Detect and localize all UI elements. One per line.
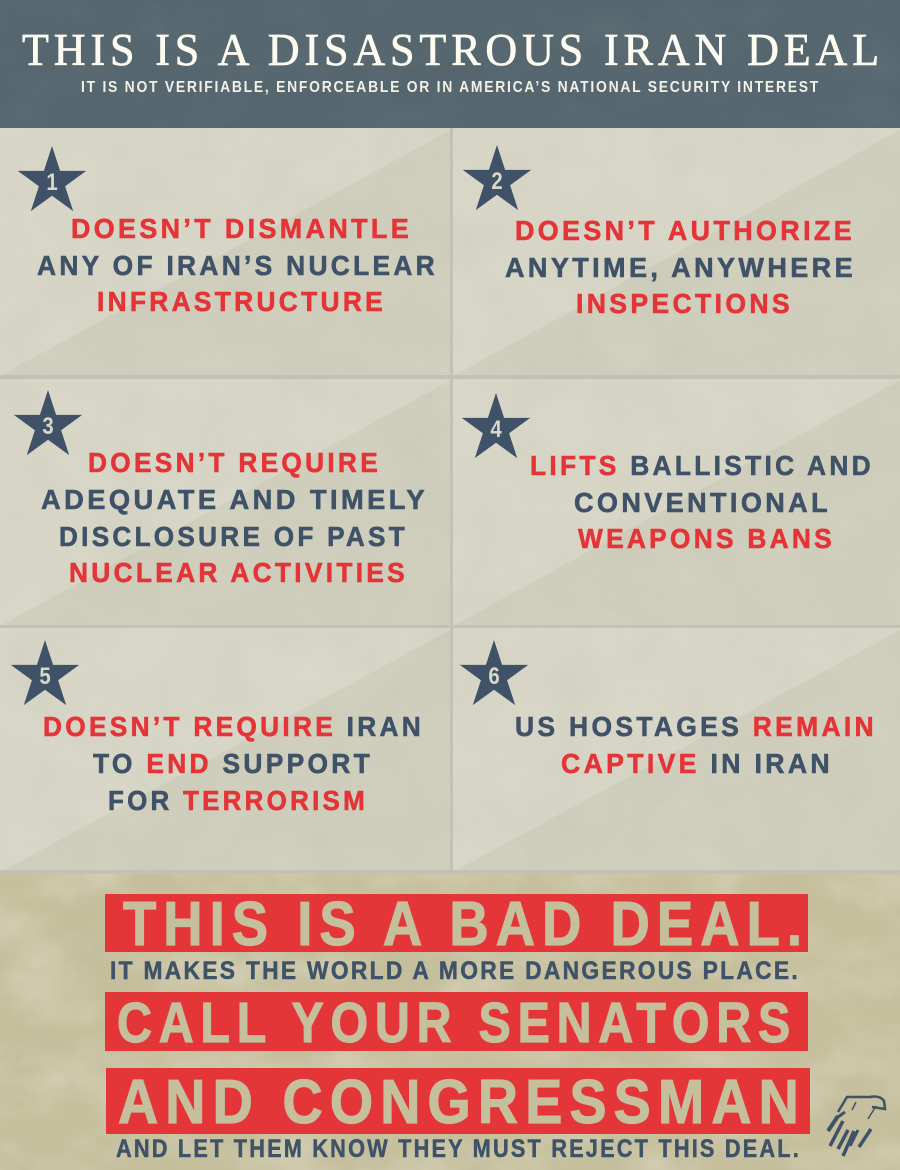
text: item 3: DOESN’T REQUIRE (88, 447, 381, 478)
panel: item 3 diagonal shade (0, 380, 451, 626)
icon: eagle logo (828, 1096, 885, 1156)
text: item 2: INSPECTIONS (576, 288, 793, 319)
icon: star 1 (18, 146, 86, 211)
icon: star 5 (11, 640, 79, 705)
banner: and congressman: AND CONGRESSMAN (118, 1068, 806, 1137)
text: item 4 (530, 450, 874, 554)
panel: header band (0, 0, 900, 128)
panel: item 4 diagonal shade (453, 380, 900, 626)
text: item 2 (505, 215, 856, 319)
icon: star 6: 6 (488, 662, 500, 689)
text: item 5: TO END SUPPORT (93, 748, 373, 779)
panel: item 2 diagonal shade (453, 130, 900, 376)
icon: star 4: 4 (490, 415, 502, 442)
text: reject this deal: AND LET THEM KNOW THEY MUST REJECT THIS DEAL. (116, 1135, 801, 1163)
panel: item 3 (14, 390, 428, 588)
text: item 5: DOESN’T REQUIRE IRAN (43, 711, 424, 742)
text: item 6: US HOSTAGES REMAIN (515, 711, 877, 742)
title: THIS IS A DISASTROUS IRAN DEAL (22, 25, 884, 75)
panel: item 4 (462, 393, 874, 554)
panel: call to action background (0, 874, 900, 1170)
banner: this is a bad deal: THIS IS A BAD DEAL. (123, 890, 809, 959)
panel: item 5 diagonal shade (0, 630, 451, 872)
text: item 5: FOR TERRORISM (108, 785, 368, 816)
text: item 1: DOESN’T DISMANTLE (71, 213, 412, 244)
text: item 2: DOESN’T AUTHORIZE (515, 215, 855, 246)
text: item 5 (43, 711, 424, 816)
text: item 1: ANY OF IRAN’S NUCLEAR (37, 250, 438, 281)
panel: item 1 (18, 146, 438, 317)
text: item 4: CONVENTIONAL (574, 487, 831, 518)
panel: item 6 diagonal shade (453, 630, 900, 872)
panel: item 2 (463, 145, 856, 319)
icon: star 6 (460, 640, 528, 705)
text: item 1 (37, 213, 438, 317)
panel: item 6 (460, 640, 877, 779)
panel: background (0, 128, 900, 873)
icon: star 3: 3 (42, 412, 54, 439)
text: item 3: NUCLEAR ACTIVITIES (69, 557, 408, 588)
icon: star 2 (463, 145, 531, 210)
banner: call your senators: CALL YOUR SENATORS (117, 991, 797, 1055)
text: item 3: ADEQUATE AND TIMELY (41, 484, 428, 515)
text: item 3: DISCLOSURE OF PAST (59, 521, 408, 552)
text: makes the world more dangerous: IT MAKES THE WORLD A MORE DANGEROUS PLACE. (110, 957, 800, 985)
text: item 3 (41, 447, 428, 588)
icon: star 3 (14, 390, 82, 455)
text: item 4: WEAPONS BANS (578, 523, 835, 554)
text: item 6 (515, 711, 877, 779)
text: item 4: LIFTS BALLISTIC AND (530, 450, 874, 481)
text: item 1: INFRASTRUCTURE (97, 286, 386, 317)
text: item 6: CAPTIVE IN IRAN (561, 748, 833, 779)
text: item 2: ANYTIME, ANYWHERE (505, 252, 856, 283)
panel: item 5 (11, 640, 424, 816)
icon: star 5: 5 (39, 662, 51, 689)
icon: star 1: 1 (46, 168, 58, 195)
icon: star 4 (462, 393, 530, 458)
icon: star 2: 2 (491, 167, 503, 194)
panel: item 1 diagonal shade (0, 130, 451, 376)
